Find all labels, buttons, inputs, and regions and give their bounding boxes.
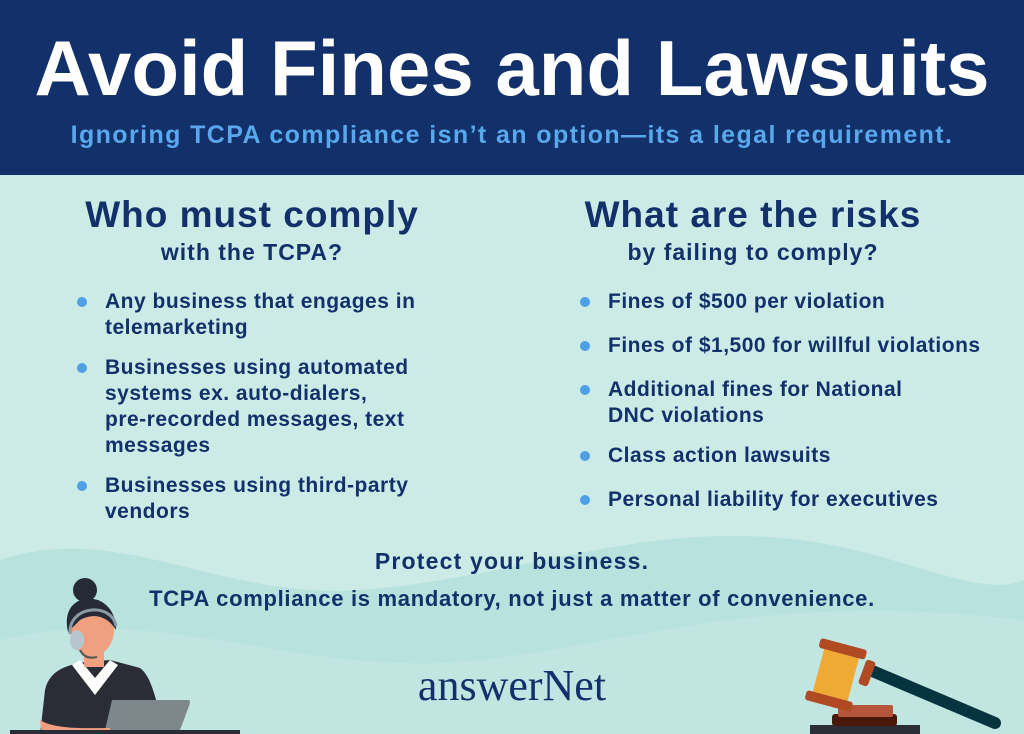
closing message: Protect your business. [375, 548, 649, 574]
right bullets: Additional fines for National [608, 378, 903, 401]
left bullets: messages [105, 434, 211, 457]
right bullets: Fines of $500 per violation [608, 290, 885, 313]
left heading [85, 194, 419, 265]
right bullets: DNC violations [608, 404, 764, 427]
header band [0, 0, 1024, 175]
subtitle: Ignoring TCPA compliance isn’t an option—its a legal requirement. [71, 121, 953, 149]
left bullets: vendors [105, 500, 190, 523]
left bullets: pre-recorded messages, text [105, 408, 404, 431]
left bullets: Businesses using automated [105, 356, 409, 379]
right heading: What are the risks [585, 194, 921, 235]
left bullets: Businesses using third-party [105, 474, 408, 497]
right bullets: Class action lawsuits [608, 444, 831, 467]
right bullets: Personal liability for executives [608, 488, 938, 511]
right heading: by failing to comply? [627, 239, 878, 265]
right heading [584, 194, 921, 265]
left bullets: Any business that engages in [105, 290, 415, 313]
left bullets [77, 290, 415, 523]
logo: answerNet [418, 661, 606, 710]
icon: woman with headset at laptop [10, 578, 240, 734]
title: Avoid Fines and Lawsuits [35, 24, 989, 112]
left heading: with the TCPA? [161, 239, 343, 265]
closing message [149, 548, 875, 611]
left bullets: systems ex. auto-dialers, [105, 382, 367, 405]
right bullets [580, 290, 981, 511]
right bullets: Fines of $1,500 for willful violations [608, 334, 981, 357]
icon: gavel [805, 638, 1001, 734]
closing message: TCPA compliance is mandatory, not just a matter of convenience. [149, 586, 875, 611]
left bullets: telemarketing [105, 316, 248, 339]
left heading: Who must comply [85, 194, 419, 235]
